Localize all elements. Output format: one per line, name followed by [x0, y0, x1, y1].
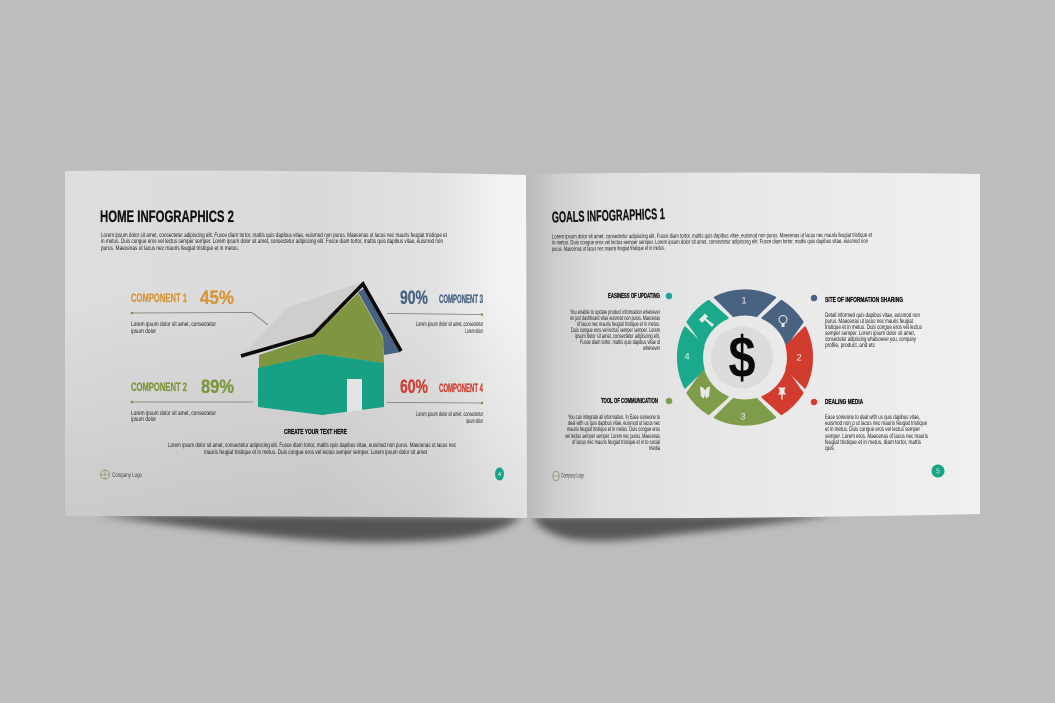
house caption body — [168, 442, 456, 456]
segment 4: 4 — [684, 352, 690, 362]
callout: easiness of updating: on just dashboard vitae euismod non purus. Maecenas — [570, 315, 660, 322]
component 1 — [131, 288, 268, 335]
page number: right: 5 — [936, 468, 940, 476]
right page intro text — [552, 232, 872, 253]
callout: easiness of updating: ipsum dolor sit amet, consectetur adipiscing elit, — [575, 333, 660, 340]
page number: right — [932, 464, 944, 478]
callout: site of information sharing: SITE OF INFORMATION SHARING — [825, 297, 903, 304]
right page intro text: purus. Maecenas ut lacus nec mauris feugiat tristique et in metus. — [552, 245, 665, 253]
callout: tool of communication: vel lectus semper semper. Lorem nec purus. Maecenas — [565, 433, 660, 440]
left page lower shading — [65, 170, 527, 518]
component 4: ipsum dolor — [466, 418, 483, 425]
component 4: COMPONENT 4 — [439, 381, 483, 395]
component 2 — [131, 377, 253, 423]
left page intro text: Lorem ipsum dolor sit amet, consectetur adipiscing elit. Fusce diam tortor, mattis quis dapibus vitae, euismod non purus. Maecenas ut lacus nec mauris feugiat tristique et — [101, 232, 447, 239]
segment 3: 3 — [740, 412, 746, 422]
callout: site of information sharing: purus. Maecenas ut lacus nec mauris feugiat — [825, 318, 913, 325]
segment: book — [688, 370, 728, 414]
house roofline — [241, 284, 401, 356]
page shadow: right — [532, 514, 840, 541]
component 3: 90% — [400, 288, 428, 309]
right page intro text: Lorem ipsum dolor sit amet, consectetur adipiscing elit. Fusce diam tortor, mattis quis dapibus vitae, euismod non purus. Maecenas ut lacus nec mauris feugiat tristique et — [552, 232, 872, 240]
callout: site of information sharing: semper semper. Lorem ipsum dolor sit amet, — [825, 330, 915, 337]
house illustration — [241, 282, 401, 415]
house door — [347, 379, 362, 412]
component 4: Lorem ipsum dolor sit amet, consectetur — [416, 411, 483, 418]
segment: gavel — [688, 301, 728, 344]
house side wall — [358, 288, 401, 355]
callout: dealing media — [811, 399, 928, 452]
house lower wall — [258, 354, 384, 415]
callout: tool of communication: You can integrate all information. In Ease someone to — [568, 414, 660, 421]
callout: tool of communication: media — [649, 445, 660, 452]
house caption: CREATE YOUR TEXT HERE — [284, 427, 347, 436]
callout: easiness of updating: whenever — [642, 345, 660, 352]
component 3: COMPONENT 3 — [439, 292, 483, 306]
callout: easiness of updating — [570, 293, 672, 352]
callout: site of information sharing: profile, product, and etc — [825, 342, 875, 349]
callout: site of information sharing — [811, 295, 922, 349]
callout: dealing media: feugiat tristique et in metus, diam tortor, mattis — [825, 439, 921, 446]
callout: easiness of updating: You enable to update product information whenever — [570, 309, 660, 316]
left page title: HOME INFOGRAPHICS 2 — [100, 208, 234, 226]
callout: easiness of updating: EASINESS OF UPDATING — [608, 293, 660, 300]
callout: dealing media: et in metus. Duis congue eros vel lectus semper — [825, 426, 920, 433]
panel: right page — [527, 172, 980, 518]
left page intro text — [101, 232, 447, 252]
callout: site of information sharing: Detail informed quis dapibus vitae, euismod non — [825, 312, 920, 319]
wheel centre disc — [711, 326, 773, 388]
callout: tool of communication: TOOL OF COMMUNICATION — [601, 398, 658, 405]
component 1: 45% — [200, 288, 234, 309]
callout: easiness of updating: Duis congue eros vel lectus semper semper. Lorem — [571, 327, 660, 334]
page number: left — [495, 468, 504, 480]
panel: left page — [65, 170, 527, 518]
house caption body: Lorem ipsum dolor sit amet, consectetur adipiscing elit. Fusce diam tortor, mattis quis dapibus vitae, euismod non purus. Maecenas ut lacus nec — [168, 442, 456, 449]
callout: easiness of updating: Fusce diam tortor, mattis quis dapibus vitae id — [580, 339, 660, 346]
house roof — [242, 282, 362, 355]
goals wheel — [678, 291, 812, 424]
company logo: right — [553, 471, 584, 481]
company logo: left — [100, 470, 142, 479]
dollar icon: $ — [728, 325, 756, 390]
callout: site of information sharing: consectetur adipiscing whatsoever you, company — [825, 336, 917, 343]
company logo: right: Company Logo — [561, 472, 584, 480]
company logo: left: Company Logo — [112, 472, 142, 479]
segment: pin — [762, 370, 802, 414]
callout: dealing media: DEALING MEDIA — [825, 399, 863, 406]
callout: dealing media: semper. Lorem eros. Maecenas of lacus nec mauris — [825, 433, 928, 440]
right page intro text: in metus. Duis congue eros vel lectus semper semper. Lorem ipsum dolor sit amet, consectetur adipiscing elit. Fusce diam tortor, mattis quis dapibus vitae, euismod non — [552, 238, 868, 246]
right page title: GOALS INFOGRAPHICS 1 — [552, 206, 665, 226]
left page sheet — [65, 170, 527, 518]
component 3: Lorem dolor — [465, 328, 483, 335]
page shadow: left — [96, 514, 522, 542]
component 3: Lorem ipsum dolor sit amet, consectetur — [416, 321, 483, 328]
callout: tool of communication: deal with us quis dapibus vitae, euismod ut lacus nec — [568, 420, 660, 427]
component 1: ipsum dolor — [131, 328, 156, 335]
house upper wall — [259, 293, 384, 368]
callout: dealing media: euismod non p ut lacus nec mauris feugiat tristique — [825, 420, 927, 427]
component 4: 60% — [400, 377, 428, 398]
right page sheet — [527, 172, 980, 518]
segment: light bulb — [762, 301, 802, 344]
component 2: 89% — [201, 377, 234, 398]
component 3 — [387, 288, 483, 335]
callout: tool of communication: of lacus nec mauris feugiat tristique et in to social — [572, 439, 660, 446]
page number: left: 4 — [498, 472, 501, 478]
callout: tool of communication: mauris feugiat tristique et in metus. Duis congue eros — [567, 426, 660, 433]
component 2: Lorem ipsum dolor sit amet, consectetur — [131, 410, 216, 417]
left page intro text: purus. Maecenas ut lacus nec mauris feugiat tristique et in metus. — [101, 245, 239, 252]
component 4 — [387, 377, 483, 425]
left page intro text: in metus. Duis congue eros vel lectus semper semper. Lorem ipsum dolor sit amet, consectetur adipiscing elit. Fusce diam tortor, mattis quis dapibus vitae, euismod non — [101, 238, 443, 245]
component 2: ipsum dolor — [131, 416, 156, 423]
callout: dealing media: quis — [825, 445, 834, 452]
component 1: Lorem ipsum dolor sit amet, consectetur — [131, 321, 216, 328]
segment 2: 2 — [796, 352, 802, 364]
component 2: COMPONENT 2 — [131, 380, 187, 394]
component 1: COMPONENT 1 — [131, 291, 187, 305]
house caption body: mauris feugiat tristique et in metus. Duis congue eros vel lectus semper semper. Lorem ipsum dolor sit amet — [204, 449, 427, 456]
callout: dealing media: Ease someone to deal with us quis dapibus vitae, — [825, 414, 920, 421]
callout: site of information sharing: tristique et in metus. Duis congue eros vel lectus — [825, 324, 922, 331]
segment 1: 1 — [741, 296, 747, 306]
callout: easiness of updating: of lacus nec mauris feugiat tristique et in metus. — [577, 321, 660, 328]
callout: tool of communication — [565, 398, 672, 452]
